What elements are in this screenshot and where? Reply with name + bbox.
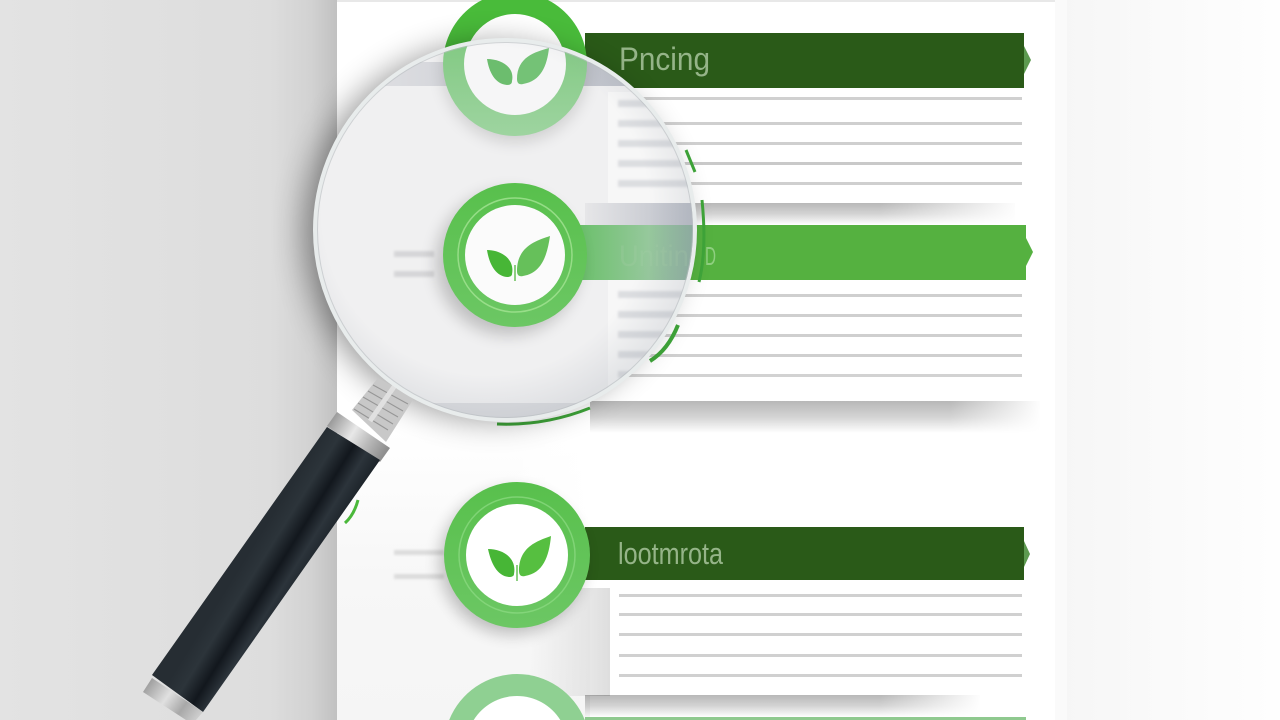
section 3 text block (610, 581, 1025, 695)
heading bar 4 (585, 717, 1026, 720)
icon: leaf pair 1 (487, 48, 549, 85)
magnifier lens (313, 38, 697, 422)
heading 2 text fragment: D (705, 241, 716, 271)
background right (1055, 0, 1280, 720)
lens top band (386, 62, 626, 86)
icon: leaf pair 3 (488, 536, 551, 581)
section 1: text lines (620, 97, 1022, 185)
lens bar 2 (580, 225, 705, 280)
badge 3 (440, 482, 590, 634)
section 2 text lines (620, 294, 1022, 377)
black grip (152, 427, 380, 712)
section 2 shadow above bar (590, 201, 1020, 225)
icon: leaf pair 2 (487, 236, 550, 281)
section 2 lower shadow (590, 399, 1042, 435)
lens dashes (394, 251, 434, 277)
lens faded text: Uniting (619, 240, 704, 273)
badge 1 (443, 0, 587, 136)
lens bottom band (434, 403, 576, 417)
green sliver beside grip (345, 500, 358, 523)
lens rim (315, 40, 695, 420)
lens background (317, 52, 630, 403)
section 4 shadow (585, 693, 982, 717)
heading bar 3 (585, 527, 1024, 580)
section 3 gray side panel (530, 588, 610, 696)
metal end cap (143, 678, 203, 720)
lens white right panel (608, 92, 703, 404)
heading 1 text: Pncing (619, 41, 710, 77)
paper sheet (337, 0, 1067, 720)
lens drop shadow (304, 44, 680, 420)
magnifier handle (143, 378, 414, 720)
heading bar 2 (585, 225, 1026, 280)
threaded neck (352, 378, 414, 442)
bar 1 arrow tip (1024, 46, 1031, 74)
green slivers behind lens (497, 150, 704, 424)
lens distorted lines (618, 100, 688, 378)
background left (0, 0, 338, 720)
bar 3 arrow tip (1024, 541, 1030, 567)
lens band above bar 2 (585, 203, 705, 225)
bar 2 arrow tip (1026, 238, 1033, 266)
lens top badge (438, 46, 592, 147)
metal collar (327, 412, 390, 462)
dashes section 3 (394, 550, 444, 579)
heading bar 1 (585, 33, 1024, 88)
lens rim highlight (318, 42, 692, 418)
badge 4 (449, 674, 585, 720)
lens middle badge (436, 183, 587, 335)
lens edge tint (354, 86, 690, 417)
heading 3 text: lootmrota (618, 536, 724, 571)
